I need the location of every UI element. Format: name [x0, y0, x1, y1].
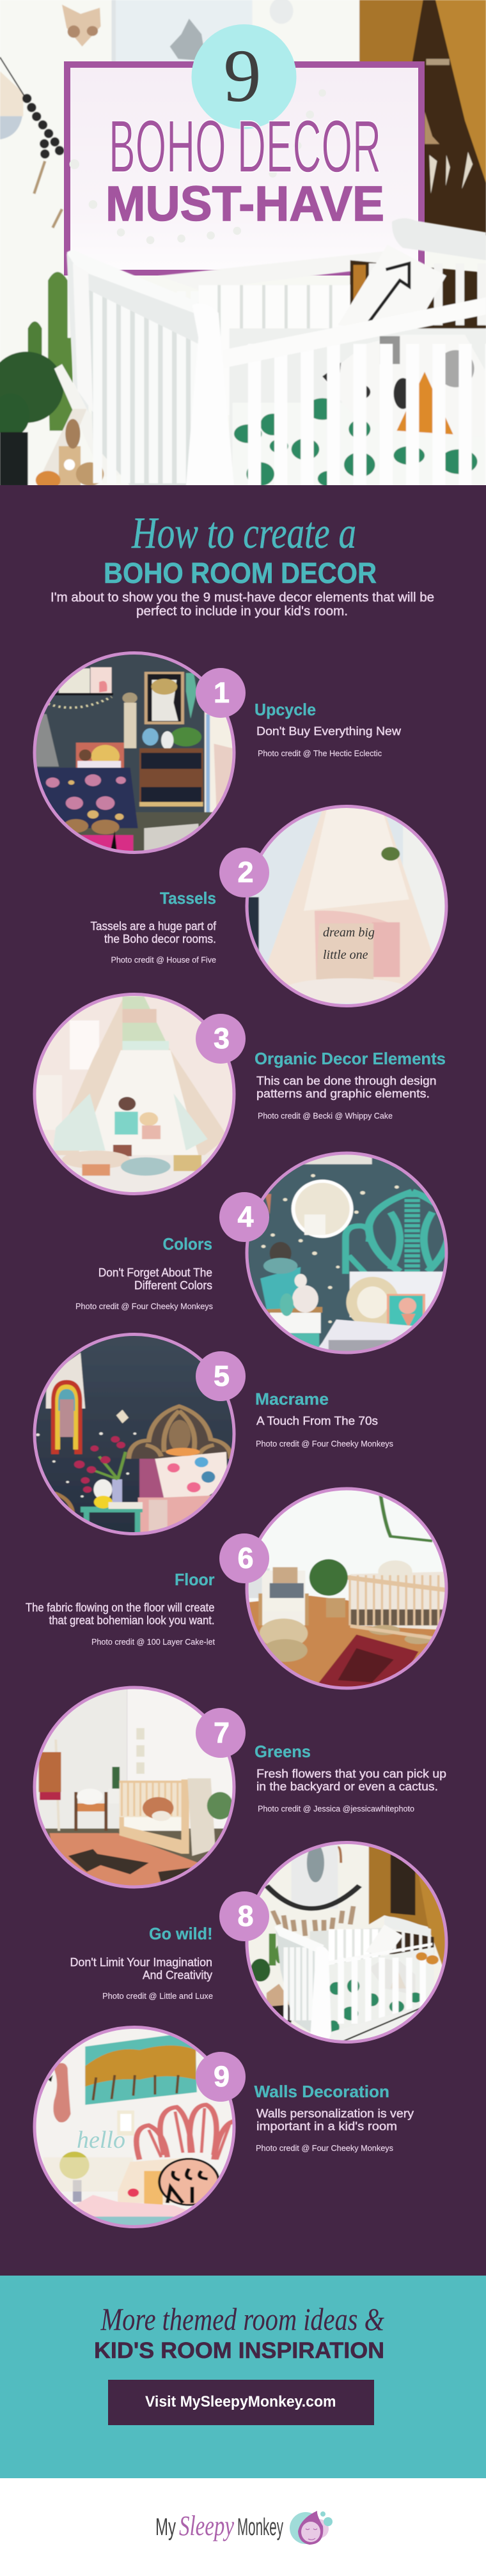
panel: purple main section [0, 485, 486, 2276]
panel: teal call to action [0, 2276, 486, 2478]
photo: palm painting wall [36, 2029, 233, 2225]
script heading: More themed room ideas & [100, 2301, 384, 2337]
number badge [196, 2052, 246, 2102]
photo credit: Photo credit @ Four Cheeky Monkeys [75, 1301, 213, 1311]
photo border [247, 1489, 446, 1688]
hero: nursery photo with title card [0, 0, 486, 490]
item text: that great bohemian look you want. [49, 1614, 215, 1627]
number badge [219, 1533, 269, 1583]
photo credit: Photo credit @ Four Cheeky Monkeys [256, 2143, 393, 2153]
photo: nursery with rug [248, 1491, 445, 1686]
button: Visit MySleepyMonkey.com [145, 2393, 336, 2410]
item text: This can be done through design [256, 1075, 436, 1087]
logo: My Sleepy Monkey: Sleepy [179, 2510, 234, 2541]
photo border [247, 1153, 446, 1353]
photo credit: Photo credit @ House of Five [111, 955, 216, 965]
item heading: Floor [175, 1570, 215, 1589]
hero number badge [192, 24, 297, 129]
number badge: 3 [214, 1022, 230, 1055]
photo credit: Photo credit @ 100 Layer Cake-let [91, 1637, 215, 1647]
photo: room with cactus [36, 1689, 233, 1886]
photo: rainbow macrame room [31, 1331, 239, 1537]
number badge: 9 [214, 2060, 230, 2093]
title: script and bold heading [106, 24, 384, 231]
photo credit: Photo credit @ The Hectic Eclectic [258, 749, 382, 758]
number badge: 6 [237, 1542, 254, 1574]
item text: Fresh flowers that you can pick up [256, 1767, 446, 1780]
photo: lace teepee [248, 808, 445, 1004]
item text: important in a kid's room [256, 2120, 397, 2132]
item text: Tassels are a huge part of [91, 920, 217, 933]
item heading: Walls Decoration [255, 2082, 389, 2101]
logo: My Sleepy Monkey [155, 2510, 333, 2545]
logo: My Sleepy Monkey: Monkey [237, 2514, 283, 2541]
photo text: neon hello: hello [77, 2127, 125, 2153]
item text: Don't Limit Your Imagination [70, 1956, 212, 1969]
item heading: Macrame [255, 1390, 329, 1409]
item 9: walls decoration [31, 2022, 414, 2233]
item text: Don't Forget About The [98, 1266, 212, 1279]
item 1: upcycle [31, 646, 402, 862]
photo text: pillow script [324, 927, 375, 959]
icon: sleeping monkey [290, 2511, 333, 2545]
item text: A Touch From The 70s [256, 1415, 378, 1427]
intro text: I'm about to show you the 9 must-have decor elements that will be [51, 591, 434, 605]
intro text: perfect to include in your kid's room. [136, 605, 348, 619]
item text: Different Colors [134, 1279, 212, 1292]
number badge: 7 [214, 1716, 230, 1749]
number badge: 8 [237, 1900, 254, 1932]
script heading: How to create a [131, 509, 356, 558]
number badge [219, 848, 269, 897]
logo: My Sleepy Monkey: My [155, 2514, 176, 2541]
photo: white crib nursery [248, 1844, 445, 2040]
item heading: Greens [255, 1742, 311, 1761]
item text: The fabric flowing on the floor will create [26, 1601, 215, 1614]
number badge: 5 [214, 1360, 230, 1392]
item 5: macrame [31, 1331, 393, 1537]
number badge [219, 1891, 269, 1941]
photo border [247, 1842, 446, 2042]
photo: teal headboard room [248, 1154, 445, 1351]
photo border [35, 2028, 234, 2227]
section intro [51, 509, 434, 619]
item text: patterns and graphic elements. [256, 1087, 430, 1100]
item text: And Creativity [143, 1969, 212, 1982]
hero photo: crib in front of card [67, 218, 486, 486]
item 2: tassels [91, 802, 453, 1014]
photo: kids in teepee [31, 991, 239, 1196]
photo credit: Photo credit @ Four Cheeky Monkeys [256, 1439, 393, 1448]
item 7: greens [31, 1685, 446, 1893]
number badge [196, 1014, 246, 1064]
number badge: 1 [214, 676, 230, 709]
item text: Walls personalization is very [256, 2107, 414, 2120]
photo border [35, 1688, 234, 1887]
item 8: go wild [70, 1835, 453, 2050]
number badge: 2 [237, 856, 254, 888]
number badge [196, 668, 246, 718]
bold heading: KID'S ROOM INSPIRATION [94, 2338, 384, 2363]
item 4: colors [75, 1148, 453, 1358]
item text: in the backyard or even a cactus. [256, 1780, 438, 1793]
photo border [35, 1335, 234, 1534]
item 3: organic decor elements [31, 991, 446, 1196]
photo text: pillow script: dream big [323, 926, 375, 940]
number badge [196, 1351, 246, 1401]
photo credit: Photo credit @ Jessica @jessicawhitephoto [258, 1804, 414, 1813]
number badge: 4 [237, 1200, 254, 1233]
photo border [247, 807, 446, 1006]
faint beads visible through card [70, 89, 326, 244]
item 6: floor [26, 1482, 453, 1694]
photo: upcycled bedroom [36, 655, 233, 851]
item text: Don't Buy Everything New [256, 725, 402, 738]
item heading: Colors [162, 1234, 212, 1253]
heading: Must-Have: MUST-HAVE [106, 176, 384, 231]
number badge [219, 1192, 269, 1242]
button [108, 2380, 374, 2425]
item text: the Boho decor rooms. [104, 933, 216, 945]
photo border [35, 653, 234, 853]
number badge [196, 1708, 246, 1758]
photo credit: Photo credit @ Becki @ Whippy Cake [258, 1111, 393, 1121]
bold heading: BOHO ROOM DECOR [104, 557, 377, 589]
photo credit: Photo credit @ Little and Luxe [102, 1991, 213, 2001]
photo border [35, 995, 234, 1194]
item heading: Go wild! [149, 1924, 212, 1943]
item heading: Organic Decor Elements [255, 1049, 446, 1068]
item heading: Upcycle [255, 700, 316, 719]
hero number badge: 9 [224, 34, 261, 118]
photo text: pillow script: little one [323, 948, 368, 962]
title card frame [64, 61, 425, 275]
hero photo: wall, curtains and decor [0, 0, 486, 490]
item heading: Tassels [160, 888, 216, 908]
